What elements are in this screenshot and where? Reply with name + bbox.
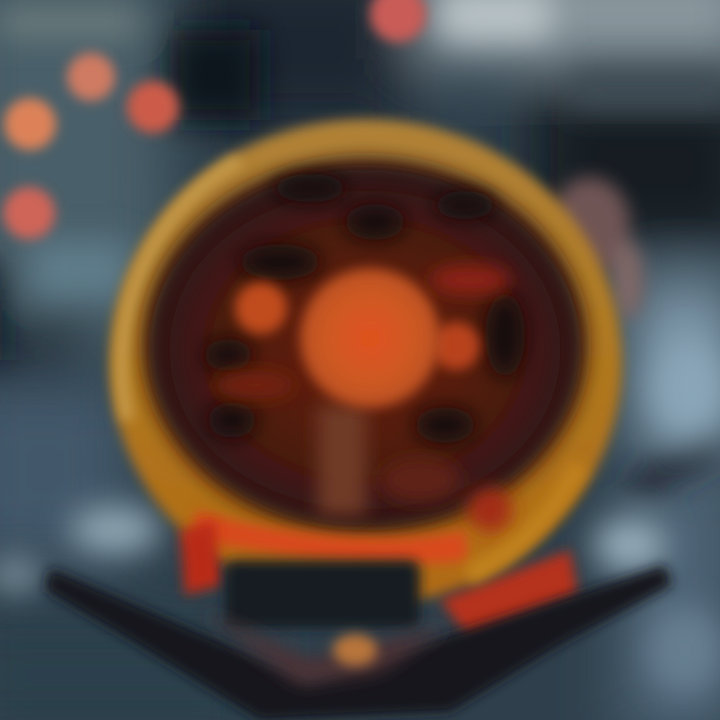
circular device	[110, 119, 622, 605]
indicator lights: orange dots upper left	[3, 0, 426, 239]
red highlights in disc	[215, 265, 512, 532]
ring lighter left highlight	[122, 160, 240, 420]
open tray / dark V-shaped base	[45, 565, 672, 720]
central stem	[318, 405, 366, 515]
dark mechanical spots	[204, 174, 525, 443]
reddish debris behind the ring, right	[550, 177, 644, 320]
dark inner disc	[145, 159, 585, 531]
outer amber ring	[110, 119, 622, 605]
red bottom band of the device	[180, 460, 588, 640]
side orange knobs	[235, 282, 287, 334]
central orange hub	[300, 268, 440, 408]
dark screen plate	[225, 560, 420, 628]
